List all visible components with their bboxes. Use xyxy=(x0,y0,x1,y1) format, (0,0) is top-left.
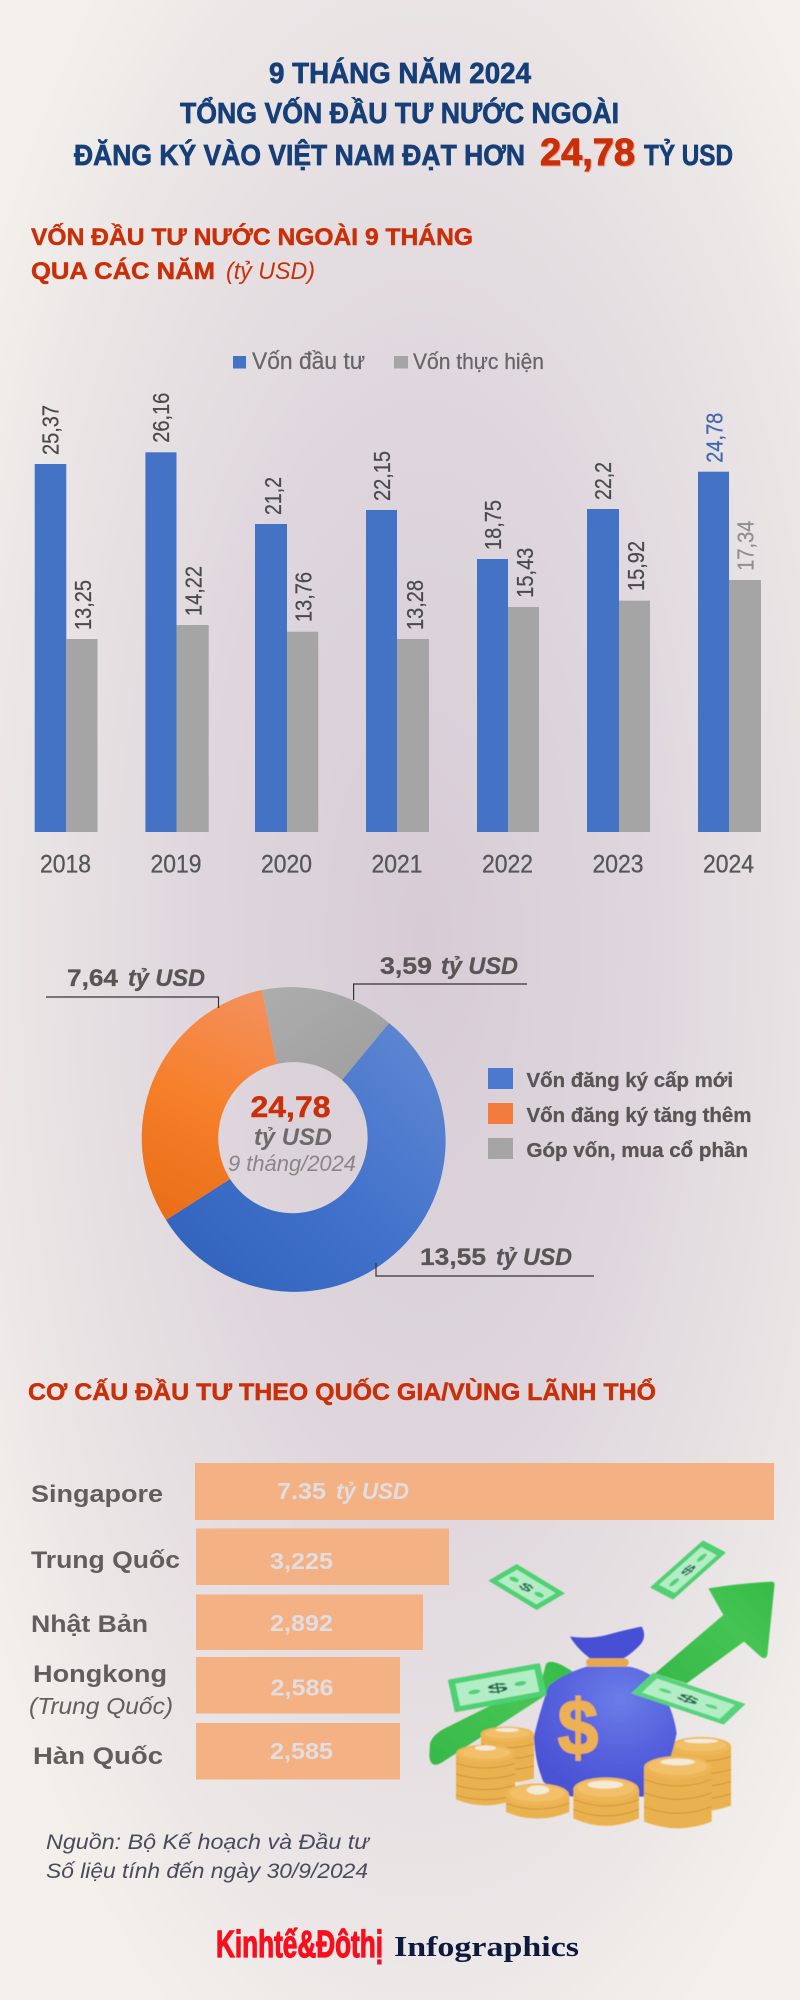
value labels: 24,78 xyxy=(701,413,727,463)
year axis labels: 2021 xyxy=(372,851,422,879)
row: Hongkong: 2,586 xyxy=(270,1674,334,1700)
year axis labels: 2018 xyxy=(40,851,91,879)
legend: bar chart: Vốn thực hiện xyxy=(413,349,544,374)
legend: donut: Vốn đăng ký cấp mới xyxy=(526,1070,733,1092)
row: Trung Quốc xyxy=(31,1528,449,1585)
heading: structure by country: CƠ CẤU ĐẦU TƯ THEO QUỐC GIA/VÙNG LÃNH THỔ xyxy=(28,1378,656,1406)
row: Hongkong: (Trung Quốc) xyxy=(29,1693,173,1719)
row: Hàn Quốc: Hàn Quốc xyxy=(33,1743,163,1770)
row: Hongkong: Hongkong xyxy=(33,1661,167,1688)
value labels: 15,43 xyxy=(512,548,538,598)
donut centre total xyxy=(228,1091,356,1176)
row: Hàn Quốc xyxy=(33,1723,400,1780)
icon: bill top left: $ xyxy=(515,1580,539,1595)
value labels: 13,76 xyxy=(291,572,317,622)
source note xyxy=(46,1831,371,1883)
illustration: money bag, coins, bills and rising arrow xyxy=(429,1540,775,1828)
source note: Nguồn: Bộ Kế hoạch và Đầu tư xyxy=(46,1831,371,1854)
source note: Số liệu tính đến ngày 30/9/2024 xyxy=(46,1860,368,1883)
row: Nhật Bản: 2,892 xyxy=(270,1610,333,1636)
bar chart xyxy=(35,393,761,879)
2021 bars xyxy=(366,510,429,832)
value labels xyxy=(38,393,758,630)
heading: capital by year: (tỷ USD) xyxy=(226,258,315,285)
callout: 13,55: tỷ USD xyxy=(496,1244,572,1271)
icon: bill top right: $ xyxy=(677,1562,700,1578)
logo: Infographics xyxy=(394,1931,579,1963)
2020 bars xyxy=(255,524,318,832)
row: Singapore: 7.35 xyxy=(277,1478,326,1504)
row: Hongkong xyxy=(29,1657,400,1719)
value labels: 21,2 xyxy=(260,477,286,515)
title: ĐĂNG KÝ VÀO VIỆT NAM ĐẠT HƠN xyxy=(74,138,525,172)
icon: bill top right xyxy=(650,1540,726,1600)
2023 bars xyxy=(587,509,650,832)
icon: money bag: $ xyxy=(558,1683,598,1771)
2019 bars xyxy=(145,452,209,832)
legend: donut xyxy=(488,1068,752,1162)
callout: 3,59: 3,59 xyxy=(380,953,432,980)
title: 24,78 xyxy=(540,132,635,174)
2022 bars xyxy=(477,559,539,832)
row: Nhật Bản xyxy=(31,1594,423,1650)
segment: capital contribution xyxy=(262,987,389,1080)
icon: bill mid left xyxy=(448,1663,547,1712)
callout: 7,64 xyxy=(46,965,218,1008)
icon: back coin stacks xyxy=(481,1727,731,1811)
row: Trung Quốc: Trung Quốc xyxy=(31,1547,180,1574)
callout: 13,55 xyxy=(376,1244,594,1276)
logo: Kinhtế&Đôthị xyxy=(216,1924,383,1966)
title: TỔNG VỐN ĐẦU TƯ NƯỚC NGOÀI xyxy=(180,96,619,130)
icon: rising arrow xyxy=(429,1582,775,1765)
title xyxy=(74,56,733,174)
value labels: 15,92 xyxy=(623,541,649,591)
year axis labels: 2019 xyxy=(150,851,202,879)
year axis labels xyxy=(40,851,754,879)
icon: bill top left xyxy=(488,1564,565,1610)
callout: 13,55: 13,55 xyxy=(420,1244,486,1271)
row: Singapore: tỷ USD xyxy=(336,1478,409,1504)
callout: 7,64: 7,64 xyxy=(67,965,119,992)
segment: new registered capital xyxy=(166,1023,446,1292)
legend: bar chart xyxy=(233,348,544,375)
icon: bill mid right: $ xyxy=(673,1691,703,1707)
donut centre total: 24,78 xyxy=(250,1091,330,1124)
value labels: 18,75 xyxy=(480,500,506,550)
value labels: 26,16 xyxy=(148,393,174,443)
icon: front coin stacks xyxy=(456,1745,712,1828)
row: Trung Quốc: 3,225 xyxy=(270,1548,333,1574)
legend: donut: Góp vốn, mua cổ phần xyxy=(526,1140,748,1162)
heading: capital by year: VỐN ĐẦU TƯ NƯỚC NGOÀI 9 THÁNG xyxy=(31,223,473,251)
row: Hàn Quốc: 2,585 xyxy=(270,1738,333,1764)
legend: bar chart: Vốn đầu tư xyxy=(252,348,365,375)
heading: capital by year: QUA CÁC NĂM xyxy=(31,257,215,285)
icon: bill mid left: $ xyxy=(486,1679,510,1697)
icon: money bag xyxy=(534,1627,677,1797)
year axis labels: 2020 xyxy=(261,851,312,879)
title: 9 THÁNG NĂM 2024 xyxy=(269,56,531,90)
value labels: 25,37 xyxy=(38,405,64,455)
row: Singapore: Singapore xyxy=(31,1481,163,1508)
year axis labels: 2023 xyxy=(592,851,644,879)
icon: bill mid right xyxy=(631,1673,746,1725)
value labels: 13,25 xyxy=(70,580,96,630)
heading: capital by year xyxy=(31,223,473,285)
value labels: 17,34 xyxy=(732,521,758,571)
callout: 3,59: tỷ USD xyxy=(441,953,518,980)
value labels: 22,2 xyxy=(590,462,616,500)
value labels: 13,28 xyxy=(402,580,428,630)
donut centre total: 9 tháng/2024 xyxy=(228,1151,356,1176)
value labels: 14,22 xyxy=(180,566,206,616)
2018 bars xyxy=(35,464,98,832)
legend: donut: Vốn đăng ký tăng thêm xyxy=(526,1105,752,1127)
horizontal bar chart: countries xyxy=(29,1463,774,1780)
2024 bars xyxy=(698,472,761,832)
donut chart xyxy=(142,987,446,1292)
value labels: 22,15 xyxy=(369,451,395,501)
row: Nhật Bản: Nhật Bản xyxy=(31,1611,148,1638)
year axis labels: 2024 xyxy=(703,851,754,879)
callout: 3,59 xyxy=(354,953,527,1000)
row: Singapore xyxy=(31,1463,774,1520)
logo xyxy=(216,1924,579,1966)
year axis labels: 2022 xyxy=(482,851,533,879)
donut centre total: tỷ USD xyxy=(254,1124,332,1151)
segment: additional registered capital xyxy=(142,990,277,1220)
title: TỶ USD xyxy=(644,138,733,172)
callout: 7,64: tỷ USD xyxy=(128,965,205,992)
